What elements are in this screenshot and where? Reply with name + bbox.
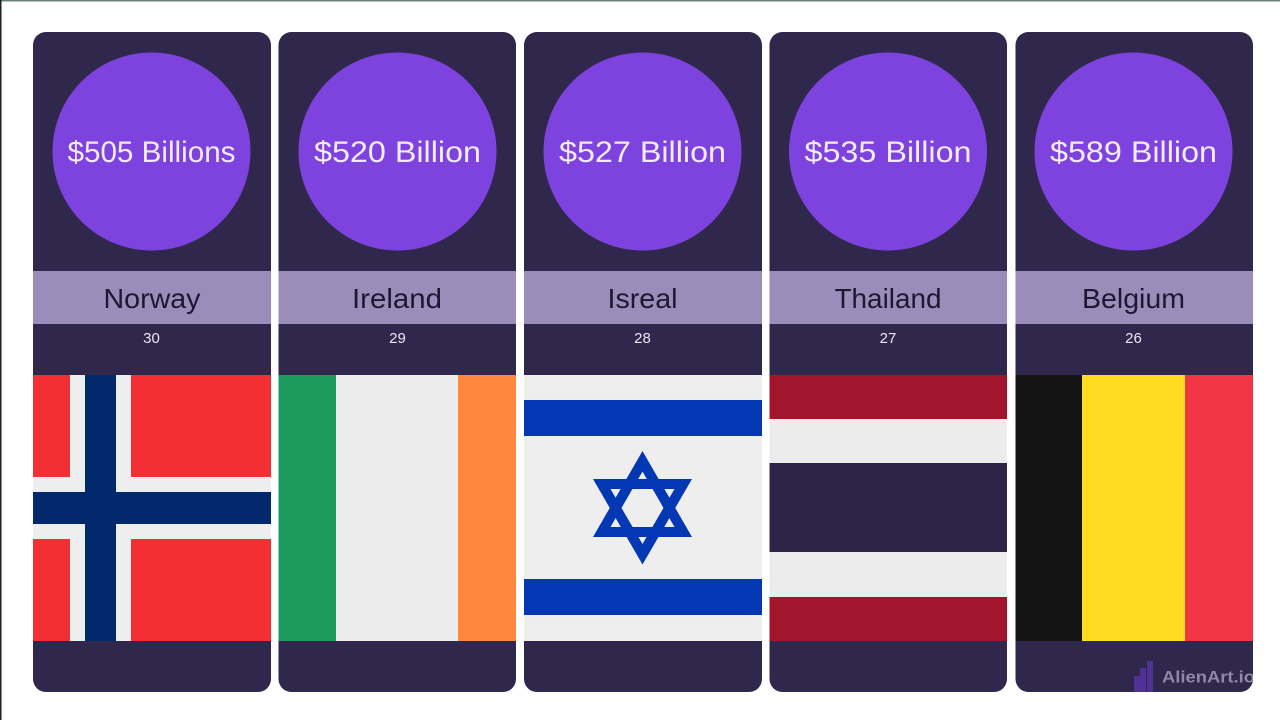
icon: star of David — [593, 451, 692, 564]
country name: Ireland — [278, 271, 516, 324]
value circle: Norway: $505 Billions — [68, 136, 236, 169]
flag: Ireland — [278, 375, 516, 641]
value circle: Isreal: $527 Billion — [559, 136, 726, 169]
rank: 26: 26 — [1125, 330, 1142, 347]
country name: Belgium — [1016, 271, 1253, 324]
rank: 27: 27 — [880, 330, 896, 347]
icon: watermark bars — [1134, 661, 1153, 692]
value circle: Isreal — [544, 52, 742, 250]
panel: Ireland — [278, 32, 516, 692]
panel: Isreal — [524, 32, 762, 692]
panel: Norway — [33, 32, 271, 692]
value circle: Belgium: $589 Billion — [1050, 136, 1217, 169]
value circle: Belgium — [1034, 52, 1232, 250]
flag: Israel — [524, 375, 762, 641]
watermark: AlienArt.io — [1134, 661, 1255, 692]
panel: Thailand — [770, 32, 1007, 692]
value circle: Thailand: $535 Billion — [804, 136, 972, 169]
country name: Norway — [33, 271, 271, 324]
rank: 28: 28 — [634, 330, 651, 347]
value circle: Thailand — [789, 52, 987, 250]
country name: Isreal: Isreal — [608, 283, 678, 314]
rank: 30: 30 — [143, 330, 160, 347]
panel: Belgium — [1016, 32, 1255, 692]
flag: Belgium — [1016, 375, 1253, 641]
country name: Thailand — [770, 271, 1007, 324]
country name: Belgium: Belgium — [1082, 283, 1185, 314]
watermark: AlienArt.io: AlienArt.io — [1162, 668, 1255, 686]
country name: Norway: Norway — [104, 283, 200, 314]
flag: Thailand — [770, 375, 1007, 641]
country name: Isreal — [524, 271, 762, 324]
value circle: Ireland — [298, 52, 496, 250]
country name: Ireland: Ireland — [352, 283, 442, 314]
country name: Thailand: Thailand — [834, 283, 942, 314]
flag: Norway — [33, 375, 271, 641]
value circle: Ireland: $520 Billion — [314, 136, 481, 169]
rank: 29: 29 — [389, 330, 406, 347]
value circle: Norway — [52, 52, 250, 250]
